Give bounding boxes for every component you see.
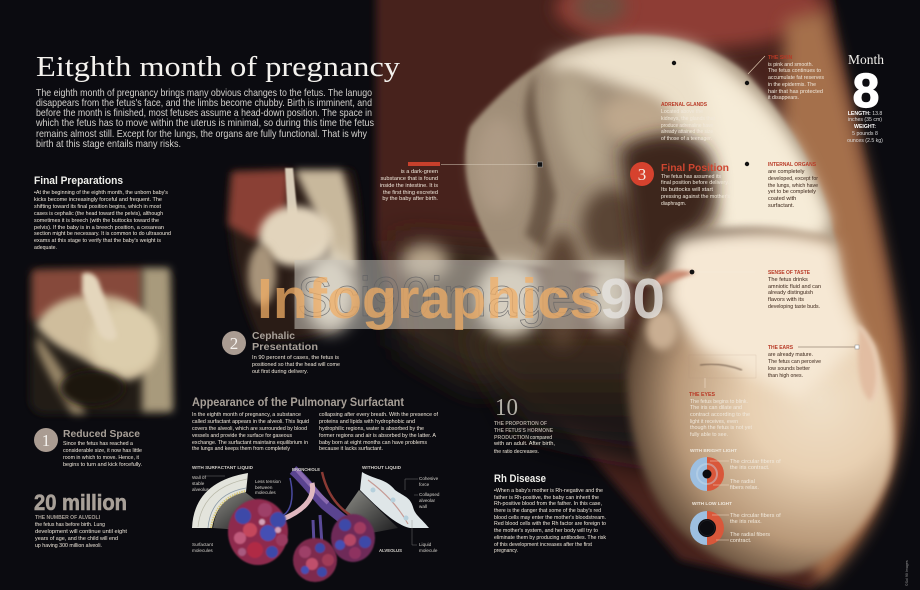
- panel: pulmonary surfactant text: hydrophilic regions, water is absorbed by the: [319, 426, 424, 432]
- callout: the skin: is pink and smooth.: [768, 62, 813, 68]
- panel: Rh disease: [494, 473, 606, 554]
- diagram labels: between: [255, 485, 273, 490]
- callout: the ears: The fetus can perceive: [768, 359, 821, 365]
- callout: the skin: [672, 55, 824, 101]
- callout: sense of taste: SENSE OF TASTE: [768, 270, 811, 276]
- panel: reduced space: considerable size, it now has little: [63, 448, 142, 454]
- callout: the skin: THE SKIN: [768, 55, 792, 61]
- panel: Rh disease: father is Rh-positive, the baby can inherit the: [494, 495, 599, 501]
- panel: month 8 data: WEIGHT:: [854, 124, 876, 130]
- panel: pulmonary surfactant text: Appearance of the Pulmonary Surfactant: [192, 397, 404, 409]
- callout: internal organs: yet to be completely: [768, 189, 816, 195]
- intro text: disappears from the fetus's face, and the limbs become chubby. Birth is imminent, and: [36, 97, 372, 109]
- callout: the ears: than high ones.: [768, 373, 803, 379]
- callout: sense of taste: flavors with its: [768, 297, 804, 303]
- panel: reduced space: Reduced Space: [63, 428, 140, 440]
- callout: internal organs: are completely: [768, 169, 805, 175]
- diagram: iris in bright light: WITH BRIGHT LIGHT: [690, 448, 737, 454]
- sector: without liquid: [360, 472, 429, 528]
- callout: sense of taste: already distinguish: [768, 290, 813, 296]
- panel: final position: pressing against the mother's: [661, 194, 730, 200]
- panel: final preparations: cases is cephalic (the head toward the pelvis), although: [34, 211, 163, 217]
- callout: the eyes: fully able to see.: [690, 432, 728, 438]
- callout: adrenal glands: kidneys, the glands that: [661, 116, 715, 122]
- diagram labels: ALVEOLUS: [379, 548, 402, 553]
- panel: cephalic presentation: [222, 330, 340, 375]
- callout: adrenal glands: already attained the size: [661, 129, 713, 135]
- panel: Rh disease: the mother's system, and her body will try to: [494, 528, 598, 534]
- diagram labels: Collapsed: [419, 492, 440, 497]
- callout: the eyes: The fetus begins to blink.: [690, 399, 748, 405]
- diagram: iris in low light: the iris relax.: [730, 519, 762, 525]
- intro text: which the fetus has to move within the uterus is minimal, so during this time the fetus: [35, 117, 374, 129]
- panel: Rh disease: of this development increases after the first: [494, 542, 592, 548]
- panel: Rh disease: •When a baby's mother is Rh-negative and the: [494, 488, 603, 494]
- callout: the eyes: The iris can dilate and: [690, 405, 742, 411]
- alveolus cluster: right: [331, 514, 375, 562]
- callout: meconium: inside the intestine. It is: [380, 183, 438, 189]
- panel: cephalic presentation: In 90 percent of cases, the fetus is: [252, 355, 339, 361]
- callout: adrenal glands: Located above the: [661, 109, 703, 115]
- callout: meconium: by the baby after birth.: [382, 196, 438, 202]
- panel: Rh disease: Red blood cells with the Rh factor are foreign to: [494, 521, 606, 527]
- panel: pulmonary surfactant text: the lungs and keeps them from completely: [192, 446, 290, 452]
- intro text: birth at this stage entails many risks.: [36, 138, 181, 150]
- panel: Rh disease: pregnancy.: [494, 548, 518, 554]
- panel: 20 million alveoli: years of age, and the child will end: [35, 536, 118, 542]
- panel: month 8 data: [847, 52, 884, 144]
- panel: Rh disease: there is the danger that some of the baby's red: [494, 508, 601, 514]
- panel: hormone proportion: THE PROPORTION OF: [494, 421, 547, 427]
- callout: the ears: THE EARS: [768, 345, 794, 351]
- callout: the ears: low sounds better: [768, 366, 810, 372]
- panel: month 8 data: 8: [853, 65, 879, 118]
- sector: with surfactant liquid: [192, 473, 248, 528]
- diagram: iris in low light: [690, 501, 781, 545]
- panel: final preparations: exams at this stage to verify that the baby's weight is: [34, 238, 161, 244]
- callout: internal organs: surfactant.: [768, 203, 795, 209]
- bronchiole: [282, 470, 350, 545]
- panel: 20 million alveoli: development will continue until eight: [35, 529, 127, 535]
- panel: hormone proportion: 10: [495, 395, 518, 421]
- intro text: before the month is finished, most fetuses assume a head-down position. The space in: [36, 107, 372, 119]
- diagram labels: alveolar: [419, 498, 436, 503]
- panel: Rh disease: blood cells may enter the mother's bloodstream.: [494, 515, 606, 521]
- panel: hormone proportion: [493, 395, 555, 455]
- diagram labels: wall: [419, 504, 427, 509]
- callout: the eyes: [689, 355, 756, 438]
- panel: pulmonary surfactant text: exchange. The surfactant maintains equilibrium in: [192, 440, 308, 446]
- panel: final position: Final Position: [661, 162, 729, 174]
- panel: month 8 data: ounces (2.5 kg): [847, 138, 883, 144]
- panel: Rh disease: Rh Disease: [494, 473, 546, 485]
- panel: reduced space: room in which to move. Hence, it: [63, 455, 139, 461]
- panel: pulmonary surfactant text: In the eighth month of pregnancy, a substance: [192, 412, 301, 418]
- alveolus cluster: lower: [293, 538, 337, 582]
- panel: pulmonary surfactant text: because it lacks surfactant.: [319, 446, 383, 452]
- panel: 20 million alveoli: the fetus has before birth. Lung: [35, 522, 105, 528]
- intro text: The eighth month of pregnancy brings many obvious changes to the fetus. The lanugo: [36, 87, 372, 99]
- diagram: iris in low light: WITH LOW LIGHT: [692, 501, 732, 507]
- callout: the eyes: light it receives, even: [690, 419, 738, 425]
- callout: the skin: in the epidermis. The: [768, 82, 816, 88]
- callout: the skin: hair that has protected: [768, 89, 823, 95]
- diagram labels: Surfactant: [192, 542, 214, 547]
- title: Eitghth month of pregnancy: [36, 51, 401, 83]
- callout: internal organs: INTERNAL ORGANS: [768, 162, 817, 168]
- panel: reduced space: begins to turn and kick forcefully.: [63, 462, 142, 468]
- panel: final position: final position before delivery.: [661, 180, 729, 186]
- diagram: iris in low light: The radial fibers: [730, 532, 770, 538]
- diagram: iris in low light: The circular fibers of: [730, 513, 781, 519]
- panel: final position: 3: [638, 165, 646, 184]
- panel: month 8 data: inches (35 cm): [848, 117, 882, 123]
- panel: cephalic presentation: 2: [230, 334, 238, 353]
- image credit: ©Sol 90 Images: [905, 560, 909, 586]
- panel: month 8 data: Month: [848, 52, 884, 67]
- panel: reduced space: [34, 428, 142, 468]
- callout: adrenal glands: [661, 102, 715, 142]
- diagram labels: Wall of: [192, 475, 207, 480]
- diagram labels: BRONCHIOLE: [292, 467, 320, 472]
- panel: final preparations: [34, 175, 171, 251]
- callout: meconium: MECONIUM: [412, 162, 440, 168]
- callout: sense of taste: amniotic fluid and can: [768, 284, 821, 290]
- callout: sense of taste: The fetus drinks: [768, 277, 808, 283]
- diagram labels: WITHOUT LIQUID: [362, 465, 402, 470]
- callout: sense of taste: [690, 270, 821, 310]
- inset photo: cephalic presentation: [228, 168, 361, 341]
- panel: hormone proportion: PRODUCTION: [494, 435, 529, 441]
- diagram labels: force: [419, 482, 430, 487]
- panel: hormone proportion: compared: [530, 435, 552, 441]
- panel: 20 million alveoli: up having 300 million alveoli.: [35, 543, 102, 549]
- panel: pulmonary surfactant text: proteins and lipids with hydrophobic and: [319, 419, 415, 425]
- callout: meconium: substance that is found: [380, 176, 438, 182]
- panel: reduced space: Since the fetus has reached a: [63, 441, 134, 447]
- panel: pulmonary surfactant text: former regions and air is absorbed by the latter. A: [319, 433, 436, 439]
- inset photo: fetus with reduced space: [30, 268, 173, 414]
- diagram: iris in bright light: The circular fibers of: [730, 459, 781, 465]
- panel: final preparations: section might be necessary. It is common to do ultrasound: [34, 231, 171, 237]
- diagram: alveoli and surfactant: [192, 465, 440, 582]
- callout: internal organs: [745, 162, 818, 209]
- panel: final position: The fetus has assumed its: [661, 174, 721, 180]
- callout: the eyes: contract according to the: [690, 412, 750, 418]
- diagram labels: molecule: [419, 548, 438, 553]
- diagram labels: WITH SURFACTANT LIQUID: [192, 465, 254, 470]
- diagram labels: molecules: [255, 490, 276, 495]
- diagram labels: Cohesive: [419, 476, 439, 481]
- diagram labels: alveolus: [192, 487, 210, 492]
- panel: pulmonary surfactant text: covers the alveoli, which are surrounded by blood: [192, 426, 307, 432]
- callout: internal organs: developed, except for: [768, 176, 818, 182]
- callout: adrenal glands: of those of a teenager.: [661, 136, 712, 142]
- head: [627, 228, 894, 574]
- callout: the eyes: though the fetus is not yet: [690, 425, 752, 431]
- panel: hormone proportion: the ratio decreases.: [494, 449, 539, 455]
- diagram: iris in bright light: [690, 448, 781, 491]
- panel: pulmonary surfactant text: called surfactant appears in the alveoli. This liquid: [192, 419, 309, 425]
- diagram labels: Liquid: [419, 542, 432, 547]
- panel: cephalic presentation: positioned so that the head will come: [252, 362, 340, 368]
- alveolus cluster: large: [228, 499, 288, 565]
- diagram: iris in low light: contract.: [730, 538, 752, 544]
- panel: final position: Its buttocks will start: [661, 187, 713, 193]
- panel: pulmonary surfactant text: vessels and provide the surface for gaseous: [192, 433, 292, 439]
- photo: fetus in the womb: [376, 0, 903, 590]
- callout: meconium: the first thing excreted: [383, 190, 438, 196]
- callout: the ears: [768, 345, 859, 379]
- diagram labels: Less tension: [255, 479, 281, 484]
- panel: final preparations: sometimes it is breech (with the buttocks toward the: [34, 218, 159, 224]
- panel: final position: [630, 162, 730, 207]
- callout: the eyes: THE EYES: [689, 392, 716, 398]
- panel: pulmonary surfactant text: [192, 397, 438, 452]
- callout: adrenal glands: ADRENAL GLANDS: [661, 102, 707, 108]
- callout: the skin: accumulate fat reserves: [768, 75, 824, 81]
- panel: hormone proportion: THE FETUS'S HORMONE: [494, 428, 554, 434]
- panel: hormone proportion: with an adult. After birth,: [493, 441, 555, 447]
- diagram labels: [192, 465, 440, 553]
- diagram: iris in bright light: the iris contract.: [730, 465, 770, 471]
- cone: left magnification: [213, 492, 262, 530]
- diagram: iris in bright light: fibers relax.: [730, 485, 759, 491]
- callout: the ears: are already mature.: [768, 352, 813, 358]
- panel: final preparations: shifting toward its final position begins, which in most: [34, 204, 161, 210]
- diagram labels: stable: [192, 481, 205, 486]
- panel: reduced space: 1: [42, 431, 50, 450]
- panel: 20 million alveoli: THE NUMBER OF ALVEOLI: [35, 515, 101, 521]
- panel: pulmonary surfactant text: collapsing after every breath. With the presence of: [319, 412, 438, 418]
- panel: final preparations: adequate.: [34, 245, 57, 251]
- panel: cephalic presentation: out first during delivery.: [252, 369, 308, 375]
- panel: cephalic presentation: Presentation: [252, 341, 318, 353]
- intro text: remains almost still. Except for the lungs, the organs are fully functional. That is why: [36, 128, 368, 140]
- panel: month 8 data: LENGTH: 13.8: [848, 111, 882, 117]
- diagram labels: molecules: [192, 548, 213, 553]
- callout: meconium: [380, 162, 542, 202]
- watermark: Infographics: [257, 267, 601, 331]
- cone: right magnification: [345, 490, 398, 535]
- panel: month 8 data: 5 pounds 8: [852, 131, 878, 137]
- callout: internal organs: the lungs, which have: [768, 183, 818, 189]
- body silhouette: [465, 35, 845, 330]
- panel: final preparations: •At the beginning of the eighth month, the unborn baby's: [34, 190, 168, 196]
- intro text: [35, 87, 374, 150]
- panel: final preparations: kicks become increasingly forceful and frequent. The: [34, 197, 162, 203]
- panel: cephalic presentation: Cephalic: [252, 330, 295, 342]
- panel: final preparations: Final Preparations: [34, 175, 123, 187]
- panel: Rh disease: Rh-positive blood from the father. In this case,: [494, 501, 602, 507]
- callout: the skin: The fetus continues to: [768, 68, 821, 74]
- callout: internal organs: coated with: [768, 196, 796, 202]
- panel: Rh disease: eliminate them by producing antibodies. The risk: [494, 535, 606, 541]
- panel: pulmonary surfactant text: baby born at eight months can have problems: [319, 440, 427, 446]
- panel: final position: diaphragm.: [661, 201, 686, 207]
- panel: 20 million alveoli: 20 million: [34, 490, 127, 515]
- panel: 20 million alveoli: [34, 490, 127, 549]
- diagram: iris in bright light: The radial: [730, 479, 755, 485]
- callout: meconium: is a dark-green: [401, 169, 438, 175]
- watermark: Sci90images: [297, 265, 603, 328]
- panel: final preparations: pelvis). If the baby is in a breech position, a cesarean: [34, 225, 164, 231]
- callout: the skin: it disappears.: [768, 95, 799, 101]
- callout: sense of taste: developing taste buds.: [768, 304, 820, 310]
- callout: adrenal glands: produce adrenaline have: [661, 123, 713, 129]
- watermark: 90: [600, 267, 665, 331]
